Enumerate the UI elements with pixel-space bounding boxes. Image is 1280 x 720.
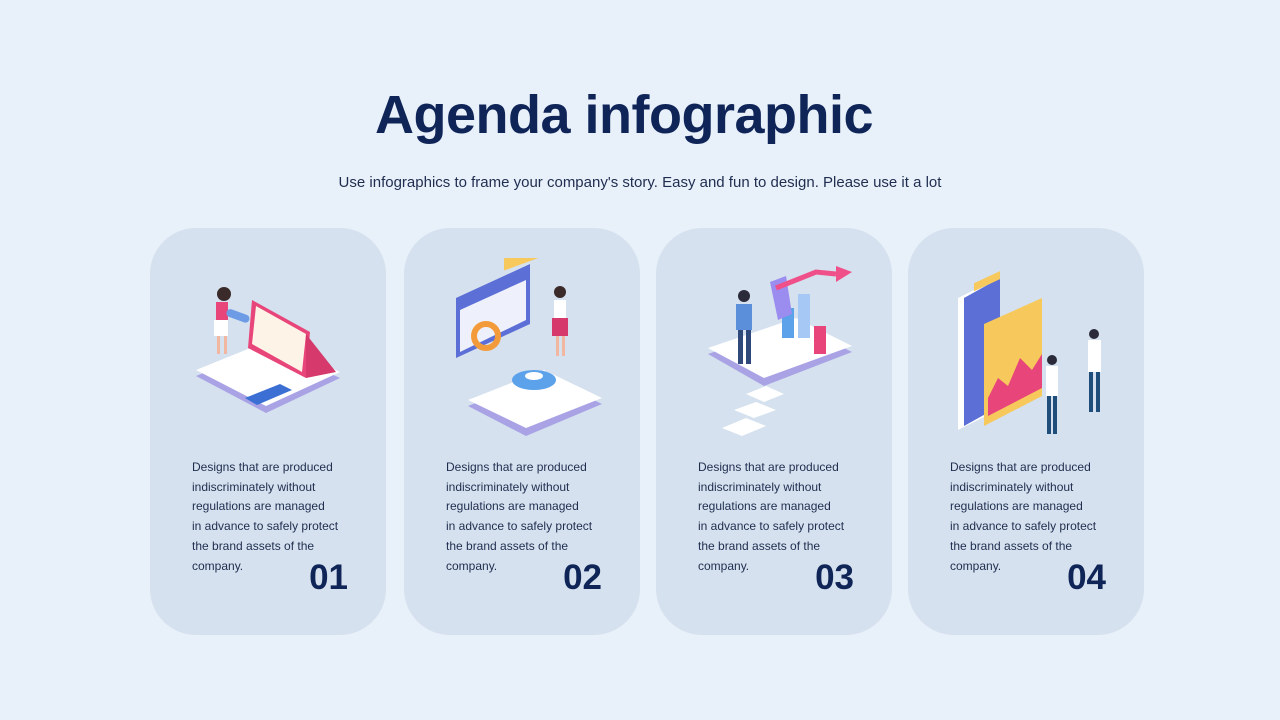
description 2 bbox=[446, 460, 592, 573]
illustration: growth chart bbox=[708, 266, 852, 436]
description 1: indiscriminately without bbox=[192, 480, 315, 494]
subtitle: Use infographics to frame your company's story. Easy and fun to design. Please use it a lot bbox=[339, 174, 941, 191]
description 3: indiscriminately without bbox=[698, 480, 821, 494]
description 2: indiscriminately without bbox=[446, 480, 569, 494]
description 3: in advance to safely protect bbox=[698, 519, 844, 533]
number 03: 03 bbox=[815, 558, 854, 597]
description 1: regulations are managed bbox=[192, 499, 325, 513]
description 2: the brand assets of the bbox=[446, 539, 568, 553]
description 4: regulations are managed bbox=[950, 499, 1083, 513]
panel: card 4 bbox=[908, 228, 1144, 635]
number 04: 04 bbox=[1067, 558, 1106, 597]
description 3 bbox=[698, 460, 844, 573]
description 2: regulations are managed bbox=[446, 499, 579, 513]
description 3: Designs that are produced bbox=[698, 460, 839, 474]
description 1 bbox=[192, 460, 338, 573]
illustration: phone analytics bbox=[958, 271, 1101, 434]
description 1: company. bbox=[192, 559, 243, 573]
description 1: the brand assets of the bbox=[192, 539, 314, 553]
description 1: in advance to safely protect bbox=[192, 519, 338, 533]
description 4: the brand assets of the bbox=[950, 539, 1072, 553]
description 3: company. bbox=[698, 559, 749, 573]
number 01: 01 bbox=[309, 558, 348, 597]
title: Agenda infographic bbox=[375, 85, 873, 145]
description 2: company. bbox=[446, 559, 497, 573]
description 1: Designs that are produced bbox=[192, 460, 333, 474]
description 4 bbox=[950, 460, 1096, 573]
description 4: in advance to safely protect bbox=[950, 519, 1096, 533]
description 4: indiscriminately without bbox=[950, 480, 1073, 494]
panel: card 2 bbox=[404, 228, 640, 635]
description 4: Designs that are produced bbox=[950, 460, 1091, 474]
number 02: 02 bbox=[563, 558, 602, 597]
panel: card 1 bbox=[150, 228, 386, 635]
description 2: in advance to safely protect bbox=[446, 519, 592, 533]
description 3: regulations are managed bbox=[698, 499, 831, 513]
description 4: company. bbox=[950, 559, 1001, 573]
description 3: the brand assets of the bbox=[698, 539, 820, 553]
panel: card 3 bbox=[656, 228, 892, 635]
description 2: Designs that are produced bbox=[446, 460, 587, 474]
illustration: dashboard bbox=[456, 258, 602, 436]
illustration: calendar bbox=[196, 287, 340, 413]
